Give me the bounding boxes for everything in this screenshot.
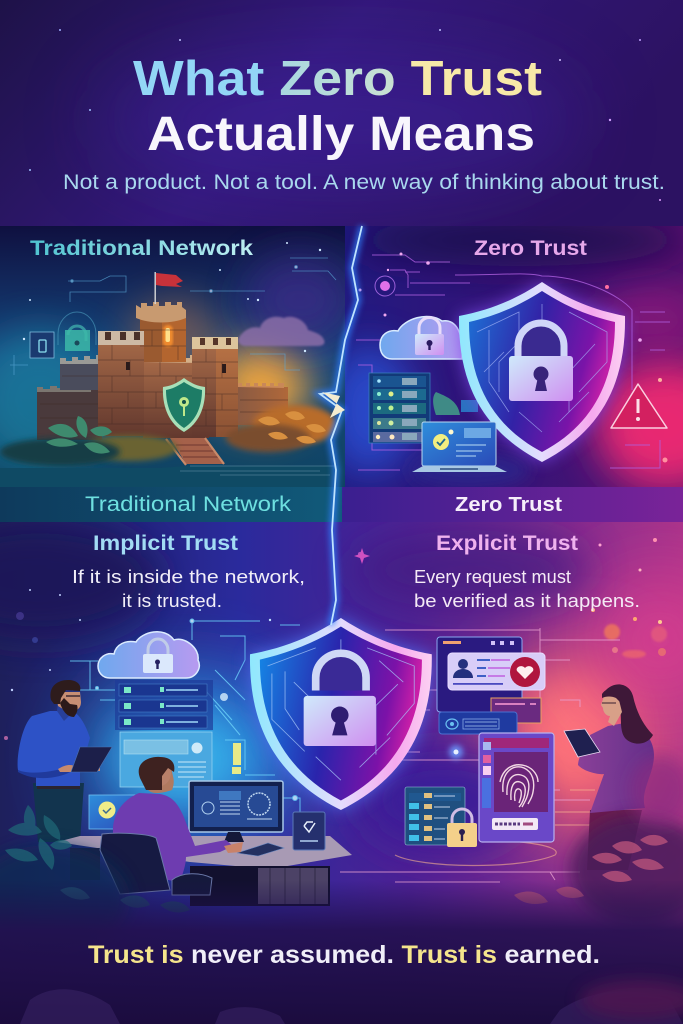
- heading: implicit trust: Implicit Trust: [93, 532, 238, 555]
- window: orange panel: [491, 698, 541, 723]
- monitor: [189, 781, 283, 842]
- icon: cloud with lock: [380, 316, 462, 359]
- window: eye scan: [439, 712, 517, 734]
- dashboard window: [120, 732, 212, 787]
- top panel label: zero trust: Zero Trust: [474, 237, 587, 260]
- subtitle: Not a product. Not a tool. A new way of thinking about trust.: [63, 170, 665, 194]
- band label: zero trust: Zero Trust: [455, 493, 562, 516]
- person: woman with tablet: [578, 684, 654, 870]
- small laptop on desk: [89, 795, 144, 829]
- water: [0, 466, 334, 482]
- brick texture: [40, 330, 288, 426]
- title: What Zero Trust: [133, 52, 542, 106]
- person: standing man: [18, 680, 100, 842]
- small shield tablet: [293, 812, 325, 850]
- network lines: [10, 258, 336, 375]
- label band: [0, 487, 683, 523]
- steps: [166, 438, 224, 465]
- stars: [23, 242, 321, 352]
- panel: traditional network illustration: [0, 226, 355, 488]
- circuit glow node: [449, 745, 463, 759]
- tagline: Trust is never assumed. Trust is earned.: [88, 941, 600, 969]
- panel: zero trust illustration: [345, 226, 683, 487]
- tablet in woman's hands: [564, 729, 600, 757]
- text: explicit trust description: [414, 567, 640, 611]
- person: seated man: [113, 757, 243, 882]
- icon: cloud with lock left: [98, 632, 199, 678]
- text: implicit trust description: [72, 567, 305, 611]
- window: id header: [437, 637, 522, 712]
- icon: laptop with check: [412, 422, 507, 472]
- band label: traditional network: Traditional Network: [85, 493, 292, 516]
- icon: exclamation mark: [232, 743, 241, 774]
- heading: explicit trust: Explicit Trust: [436, 532, 578, 555]
- lightning divider: [320, 226, 362, 625]
- title: [133, 52, 542, 161]
- icon: warning triangle: [611, 384, 667, 428]
- title: Actually Means: [147, 108, 535, 161]
- foliage: [0, 405, 337, 466]
- icon: cloud: [238, 317, 325, 346]
- icon: database and padlock: [405, 787, 477, 847]
- fingerprint: [500, 765, 538, 807]
- icon: castle shield: [163, 378, 205, 432]
- text: explicit trust description: Every request must: [414, 567, 571, 587]
- circuit lines: [70, 619, 300, 812]
- icon: server rows left: [115, 680, 213, 730]
- text: implicit trust description: If it is inside the network,: [72, 567, 305, 587]
- lower panel: [0, 520, 683, 1024]
- lock: [304, 653, 376, 746]
- text: explicit trust description: be verified as it happens.: [414, 591, 640, 611]
- icon: shield with lock: [459, 282, 625, 462]
- icon: faded device: [30, 332, 54, 358]
- icon: faded padlock: [58, 312, 96, 351]
- castle: [37, 302, 288, 440]
- circuit lines: [356, 255, 670, 470]
- foliage right: [514, 755, 683, 925]
- text: implicit trust description: it is trusted.: [122, 591, 222, 611]
- icon: server rack: [369, 373, 430, 443]
- large shield with lock: [250, 618, 432, 810]
- icon: identity card: [448, 653, 545, 690]
- footer foliage: [20, 980, 683, 1024]
- tablet in man's hand: [71, 747, 112, 772]
- icon: magenta node: [375, 276, 395, 296]
- foliage left: [0, 805, 190, 955]
- bokeh: [4, 538, 667, 740]
- header backdrop: [0, 0, 683, 226]
- bottom fade: [0, 880, 683, 1024]
- sparkle: [354, 548, 370, 564]
- lock: [509, 323, 573, 401]
- icon: tablet with fingerprint: [479, 733, 554, 842]
- top panel label: traditional network: Traditional Network: [30, 237, 253, 260]
- desk: [57, 836, 352, 906]
- flag: [154, 272, 183, 304]
- keyboard: [237, 843, 284, 856]
- small satellite device: [433, 392, 478, 415]
- office chair: [100, 833, 212, 895]
